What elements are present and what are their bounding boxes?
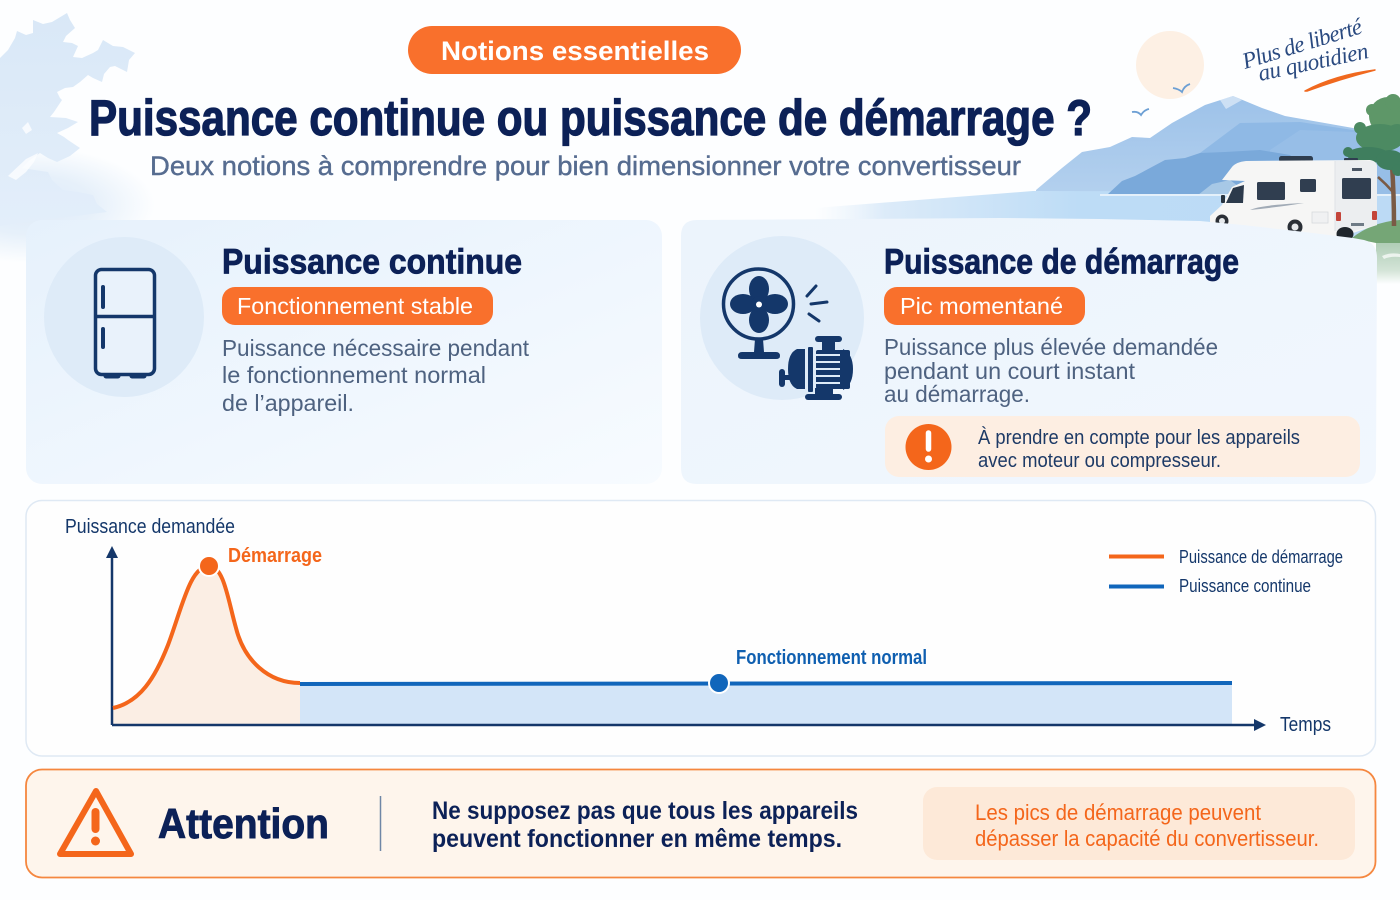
x axis label: Temps — [1280, 714, 1331, 736]
area: continuous power — [300, 684, 1232, 724]
panel: power chart — [26, 500, 1376, 756]
tag: fonctionnement stable: Fonctionnement stable — [237, 293, 473, 319]
landscape scene — [815, 31, 1400, 284]
axes — [106, 546, 1266, 731]
pill: Notions essentielles: Notions essentielles — [441, 36, 709, 66]
marker: startup peak — [199, 556, 219, 576]
pill: Notions essentielles — [408, 26, 741, 74]
description: de l’appareil. — [222, 390, 354, 416]
title: Puissance continue ou puissance de démarrage ? — [89, 90, 1092, 146]
camper van — [1210, 156, 1377, 241]
shore — [1352, 220, 1400, 284]
lake highlight — [1100, 194, 1400, 196]
line: startup power — [113, 566, 300, 708]
y axis label: Puissance demandée — [65, 516, 235, 538]
label: démarrage: Démarrage — [228, 545, 322, 567]
icon: fan and motor — [700, 236, 864, 400]
panel: puissance de démarrage — [681, 218, 1377, 484]
handwritten tagline: Plus de liberté — [1238, 13, 1367, 74]
callout: moteur ou compresseur: avec moteur ou compresseur. — [978, 450, 1221, 472]
note: pics de démarrage: Les pics de démarrage peuvent — [975, 800, 1261, 825]
warning message — [432, 797, 858, 853]
divider — [380, 796, 382, 851]
tag: pic momentané — [884, 287, 1085, 325]
birds — [1132, 84, 1190, 115]
icon: fridge — [44, 237, 204, 397]
marker: normal operation — [709, 673, 729, 693]
warning message: peuvent fonctionner en même temps. — [432, 825, 842, 853]
callout: moteur ou compresseur — [885, 416, 1360, 477]
note: pics de démarrage — [923, 787, 1355, 860]
lake — [815, 191, 1400, 240]
mountains — [1036, 96, 1400, 195]
description: Puissance nécessaire pendant — [222, 335, 530, 361]
panel: puissance continue — [26, 220, 662, 484]
warning message: Ne supposez pas que tous les appareils — [432, 797, 858, 825]
icon: warning triangle — [60, 791, 131, 854]
legend — [1109, 547, 1343, 596]
description: Puissance plus élevée demandée — [884, 334, 1218, 360]
subtitle: Deux notions à comprendre pour bien dimensionner votre convertisseur — [150, 151, 1021, 181]
sun — [1136, 31, 1204, 99]
line: continuous power — [300, 683, 1232, 684]
description: le fonctionnement normal — [222, 362, 486, 388]
legend: Puissance de démarrage — [1179, 547, 1343, 567]
handwritten tagline: au quotidien — [1256, 38, 1371, 86]
panel: attention — [26, 770, 1376, 878]
right-hand tree — [1343, 94, 1400, 226]
label: fonctionnement normal: Fonctionnement normal — [736, 647, 927, 669]
description: pendant un court instant — [884, 358, 1136, 384]
description — [884, 334, 1218, 407]
tag: pic momentané: Pic momentané — [900, 293, 1063, 319]
callout: moteur ou compresseur: À prendre en compte pour les appareils — [978, 426, 1300, 449]
heading: Puissance continue — [222, 242, 522, 282]
tag: fonctionnement stable — [222, 287, 493, 325]
heading: attention: Attention — [158, 800, 329, 847]
decorative tree silhouette — [0, 13, 135, 226]
heading: Puissance de démarrage — [884, 242, 1239, 282]
area: startup peak — [113, 566, 300, 724]
note: pics de démarrage: dépasser la capacité du convertisseur. — [975, 826, 1319, 851]
description — [222, 335, 530, 416]
description: au démarrage. — [884, 381, 1030, 407]
legend: Puissance continue — [1179, 576, 1311, 596]
